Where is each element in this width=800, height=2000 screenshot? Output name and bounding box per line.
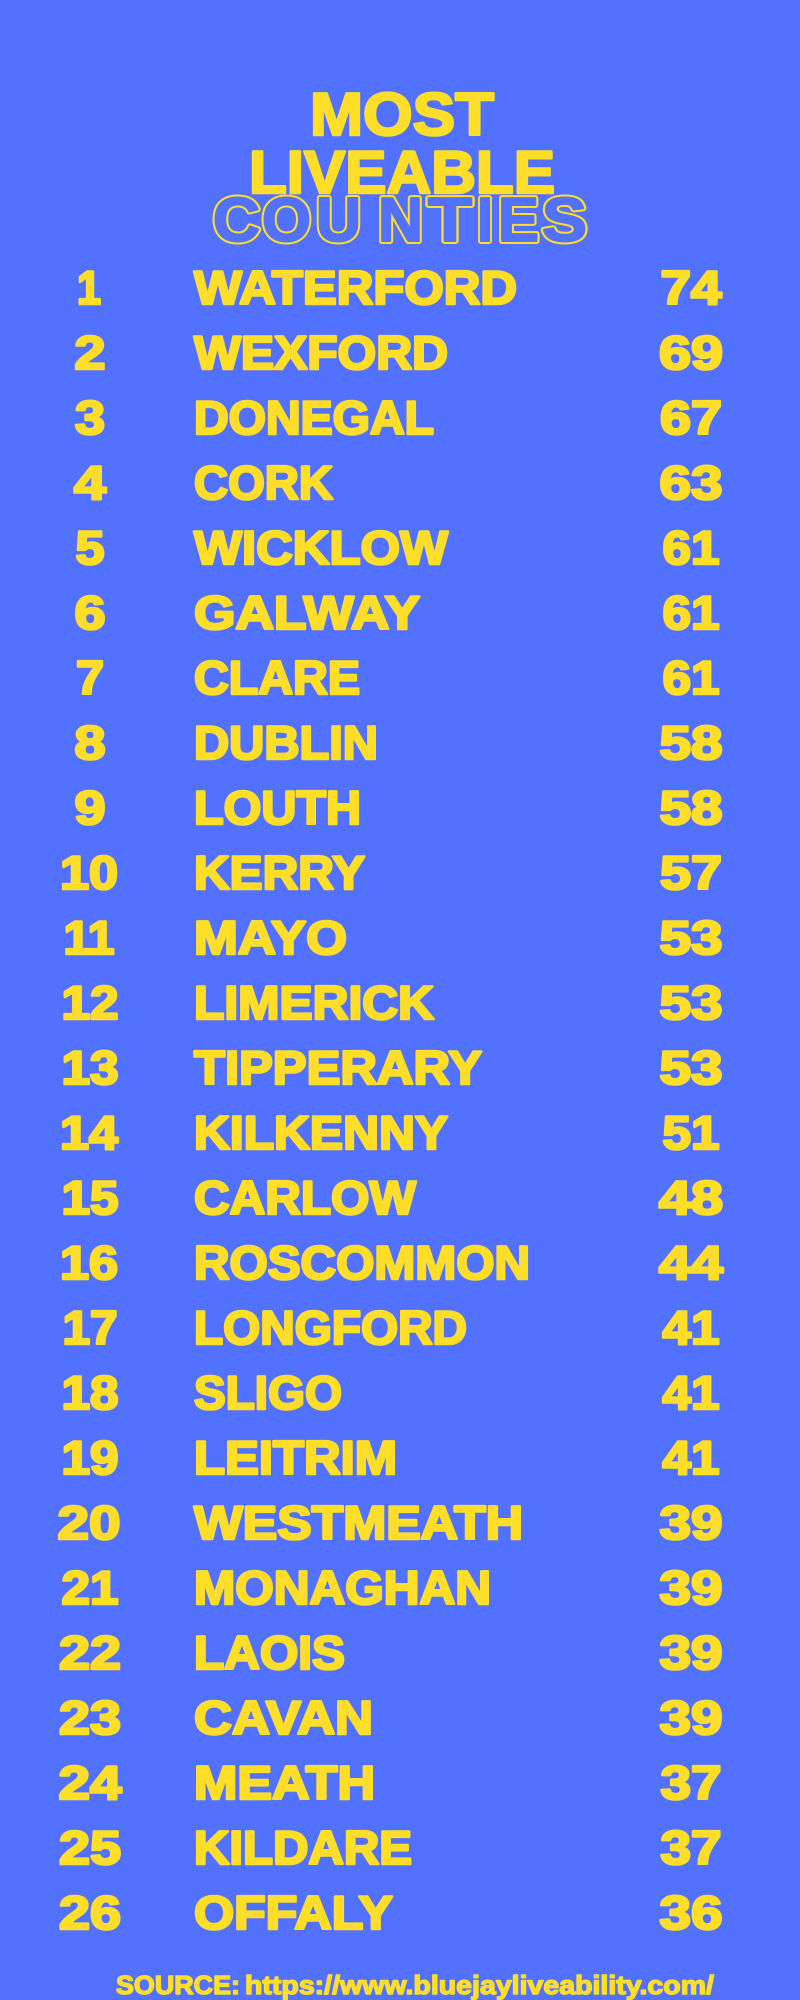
row 25: KILDARE: [194, 1821, 412, 1874]
row 2: [74, 326, 723, 379]
row 2: 69: [659, 326, 723, 379]
row 20: [58, 1496, 722, 1549]
row 12: LIMERICK: [194, 976, 434, 1029]
title line: COUNTIES outlined: S: [542, 186, 587, 255]
row 26: 26: [59, 1886, 121, 1939]
row 7: [76, 651, 720, 704]
row 7: CLARE: [194, 651, 360, 704]
row 1: 1: [77, 261, 101, 314]
row 3: DONEGAL: [194, 391, 434, 444]
row 3: 67: [660, 391, 722, 444]
title line: COUNTIES outlined: S: [542, 186, 587, 255]
row 1: WATERFORD: [194, 261, 517, 314]
row 13: TIPPERARY: [194, 1041, 482, 1094]
row 4: [74, 456, 722, 509]
row 21: 39: [660, 1561, 722, 1614]
row 20: 39: [660, 1496, 722, 1549]
title line: COUNTIES outlined: U: [316, 186, 361, 255]
row 26: [59, 1886, 722, 1939]
row 7: 61: [662, 651, 720, 704]
row 6: 6: [74, 586, 106, 639]
row 17: 17: [62, 1301, 118, 1354]
row 16: ROSCOMMON: [194, 1236, 530, 1289]
row 25: [59, 1821, 722, 1874]
title: [213, 81, 587, 255]
row 8: [74, 716, 722, 769]
row 26: 36: [660, 1886, 722, 1939]
row 25: 37: [660, 1821, 722, 1874]
row 7: 7: [76, 651, 104, 704]
title line: COUNTIES outlined: E: [498, 186, 539, 255]
row 18: 18: [62, 1366, 118, 1419]
row 24: 37: [660, 1756, 722, 1809]
row 21: 21: [62, 1561, 118, 1614]
row 3: 3: [75, 391, 105, 444]
row 23: CAVAN: [194, 1691, 373, 1744]
row 10: [60, 846, 722, 899]
title line: COUNTIES outlined: C: [213, 186, 260, 255]
title line: COUNTIES outlined: O: [262, 186, 311, 255]
title line: COUNTIES outlined: N: [378, 186, 423, 255]
row 19: [62, 1431, 720, 1484]
row 13: [62, 1041, 722, 1094]
row 8: 8: [74, 716, 106, 769]
title line: COUNTIES outlined: I: [477, 186, 493, 255]
row 10: 57: [660, 846, 722, 899]
source line: https://www.bluejayliveability.com/: [245, 1970, 714, 2000]
row 23: [59, 1691, 722, 1744]
row 12: 12: [62, 976, 118, 1029]
row 6: GALWAY: [194, 586, 420, 639]
row 15: CARLOW: [194, 1171, 417, 1224]
row 9: [74, 781, 722, 834]
row 4: 63: [660, 456, 722, 509]
row 5: 5: [76, 521, 104, 574]
row 14: 51: [662, 1106, 720, 1159]
row 18: SLIGO: [194, 1366, 342, 1419]
row 22: LAOIS: [194, 1626, 345, 1679]
row 26: OFFALY: [194, 1886, 393, 1939]
row 18: [62, 1366, 720, 1419]
row 16: 16: [60, 1236, 118, 1289]
row 1: [77, 261, 722, 314]
row 12: 53: [660, 976, 722, 1029]
row 20: WESTMEATH: [194, 1496, 523, 1549]
title line: MOST: MOST: [310, 81, 494, 148]
row 1: 74: [660, 261, 722, 314]
title line: COUNTIES outlined: N: [378, 186, 423, 255]
title line: COUNTIES outlined: C: [213, 186, 260, 255]
ranking table: [58, 261, 723, 1939]
row 14: 14: [60, 1106, 118, 1159]
row 9: LOUTH: [194, 781, 361, 834]
title line: COUNTIES outlined: I: [477, 186, 493, 255]
row 15: [62, 1171, 723, 1224]
row 24: 24: [58, 1756, 122, 1809]
row 12: [62, 976, 722, 1029]
row 3: [75, 391, 722, 444]
row 4: 4: [74, 456, 106, 509]
row 16: [60, 1236, 723, 1289]
row 9: 9: [74, 781, 106, 834]
row 10: 10: [60, 846, 118, 899]
row 2: WEXFORD: [194, 326, 448, 379]
row 10: KERRY: [194, 846, 365, 899]
row 24: MEATH: [194, 1756, 375, 1809]
row 11: 53: [660, 911, 722, 964]
row 2: 2: [74, 326, 106, 379]
row 9: 58: [660, 781, 722, 834]
row 5: [76, 521, 720, 574]
source line: SOURCE:: [116, 1970, 240, 2000]
title line: LIVEABLE: LIVEABLE: [249, 139, 555, 206]
row 22: 22: [59, 1626, 121, 1679]
title line: COUNTIES outlined: T: [428, 186, 472, 255]
title line: COUNTIES outlined: U: [316, 186, 361, 255]
row 17: LONGFORD: [194, 1301, 467, 1354]
row 24: [58, 1756, 722, 1809]
row 13: 13: [62, 1041, 118, 1094]
row 6: [74, 586, 720, 639]
row 8: 58: [660, 716, 722, 769]
row 17: 41: [662, 1301, 720, 1354]
row 15: 15: [62, 1171, 118, 1224]
row 14: [60, 1106, 720, 1159]
row 21: [62, 1561, 722, 1614]
row 4: CORK: [194, 456, 333, 509]
row 21: MONAGHAN: [194, 1561, 491, 1614]
row 6: 61: [662, 586, 720, 639]
row 22: 39: [660, 1626, 722, 1679]
title line: COUNTIES outlined: O: [262, 186, 311, 255]
row 19: LEITRIM: [194, 1431, 397, 1484]
row 18: 41: [662, 1366, 720, 1419]
row 8: DUBLIN: [194, 716, 378, 769]
title line: COUNTIES outlined: E: [498, 186, 539, 255]
row 20: 20: [58, 1496, 120, 1549]
row 11: [64, 911, 722, 964]
row 16: 44: [659, 1236, 723, 1289]
row 14: KILKENNY: [194, 1106, 448, 1159]
row 23: 23: [59, 1691, 121, 1744]
title line: COUNTIES outlined: [213, 186, 587, 255]
row 17: [62, 1301, 720, 1354]
row 5: WICKLOW: [194, 521, 449, 574]
row 23: 39: [660, 1691, 722, 1744]
row 11: MAYO: [194, 911, 347, 964]
row 11: 11: [64, 911, 114, 964]
row 22: [59, 1626, 722, 1679]
row 19: 41: [662, 1431, 720, 1484]
row 5: 61: [662, 521, 720, 574]
row 25: 25: [59, 1821, 121, 1874]
row 15: 48: [659, 1171, 723, 1224]
title line: COUNTIES outlined: T: [428, 186, 472, 255]
row 19: 19: [62, 1431, 118, 1484]
row 13: 53: [660, 1041, 722, 1094]
